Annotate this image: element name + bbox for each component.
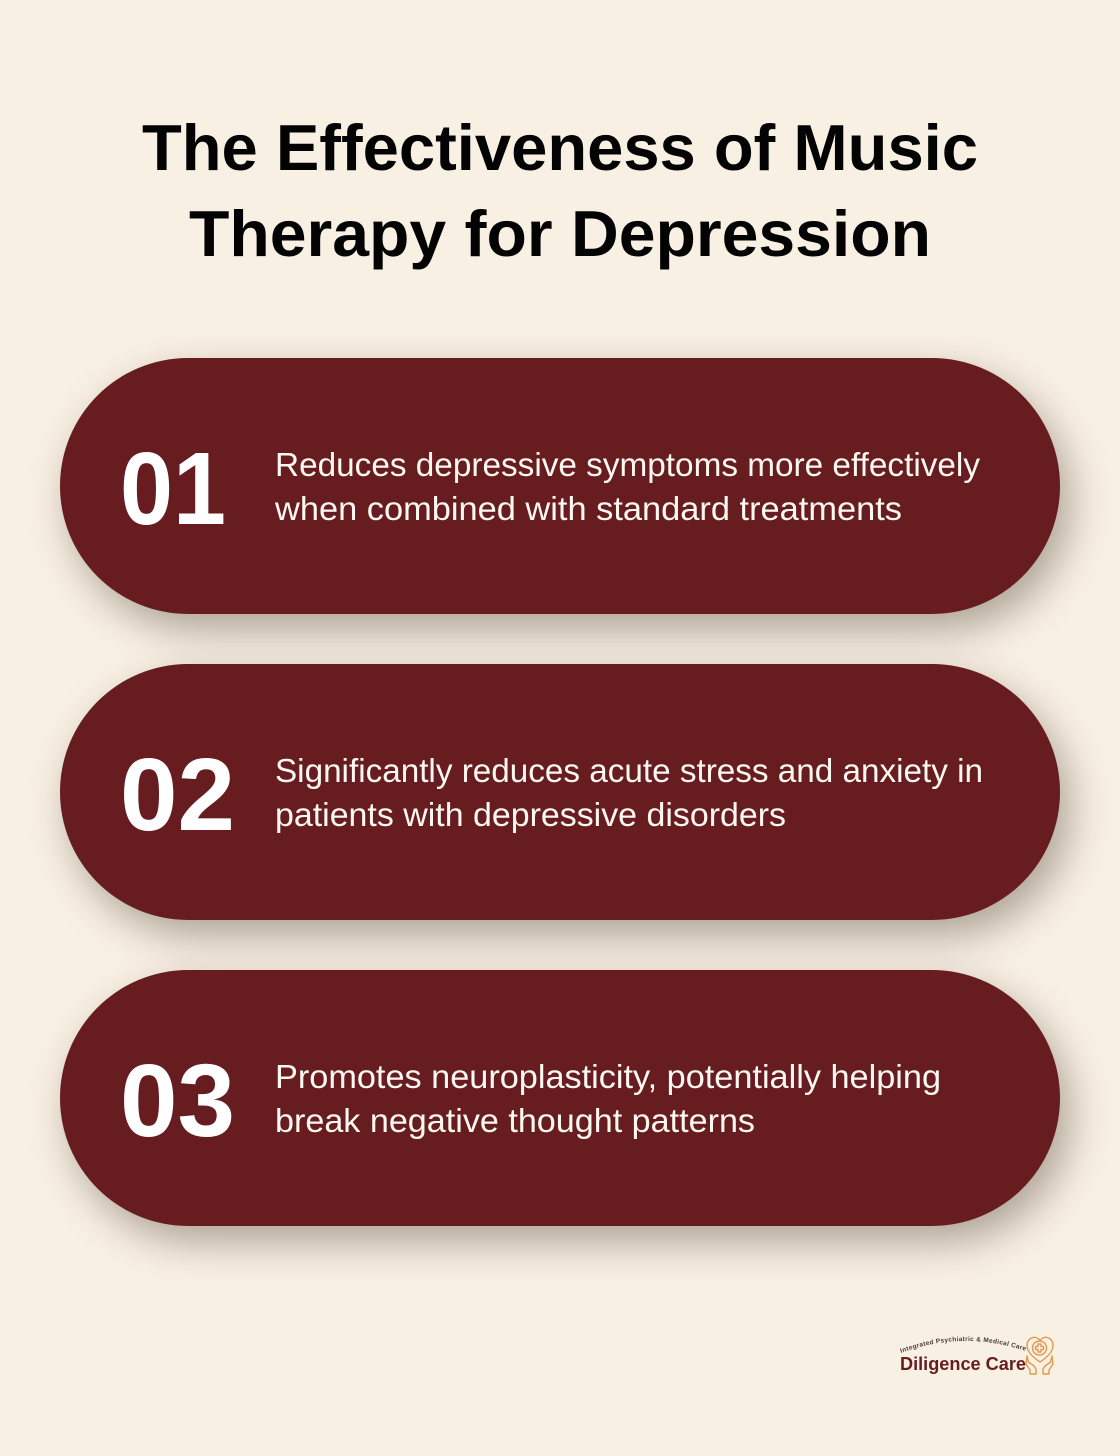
text: item 01 description: when combined with standard treatments [274, 490, 902, 527]
text: item 02 description: Significantly reduces acute stress and anxiety in [275, 752, 983, 789]
panel: item 02 background [60, 664, 1060, 920]
icon: heart and caring hands [1026, 1337, 1053, 1374]
panel: item 01 background [60, 358, 1060, 614]
title [142, 111, 978, 270]
title: Therapy for Depression [189, 197, 931, 270]
logo wordmark: Diligence Care [900, 1353, 1026, 1374]
number 03: 03 [120, 1043, 235, 1158]
text: item 01 description: Reduces depressive symptoms more effectively [275, 446, 980, 483]
item 03 content [120, 1043, 941, 1158]
title: The Effectiveness of Music [142, 111, 978, 184]
panel: item 03 background [60, 970, 1060, 1226]
text: item 03 description [275, 1058, 941, 1139]
number 01: 01 [120, 431, 226, 546]
logo tagline: Integrated Psychiatric & Medical Care [900, 1336, 1026, 1353]
item 01 content [120, 431, 980, 546]
item 02 content [120, 737, 983, 852]
logo: Diligence Care [900, 1336, 1054, 1375]
number 02: 02 [120, 737, 235, 852]
text: item 02 description: patients with depressive disorders [275, 796, 786, 833]
text: item 03 description: Promotes neuroplasticity, potentially helping [275, 1058, 941, 1095]
text: item 03 description: break negative thought patterns [275, 1102, 755, 1139]
text: item 01 description [274, 446, 980, 527]
text: item 02 description [275, 752, 983, 833]
